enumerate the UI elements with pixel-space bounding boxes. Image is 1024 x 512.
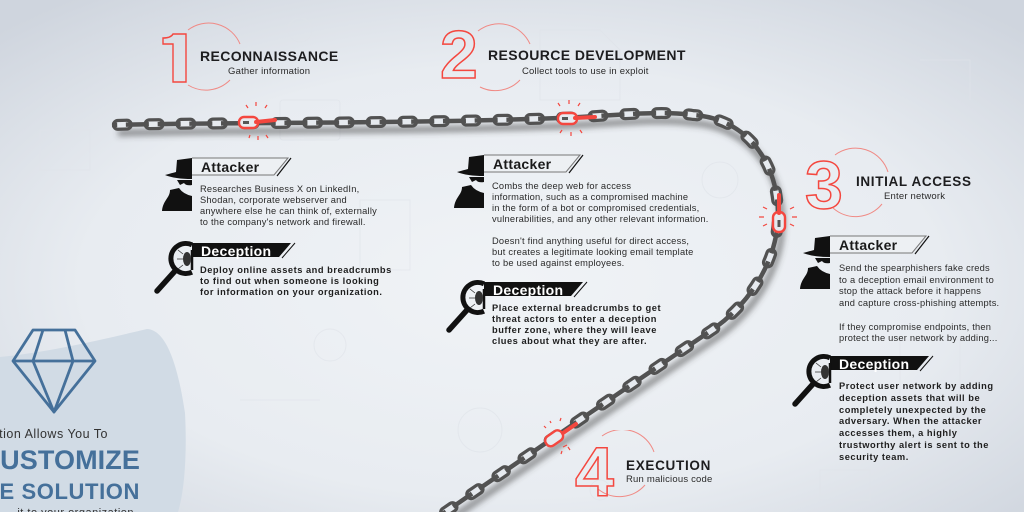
text: deception 3: Protect user network by adding deception assets that will be completely unexpected by the adversary. When the attacker accesses them, a highly trustworthy alert is sent to the security team.	[839, 381, 994, 462]
text: deception 1: Deploy online assets and breadcrumbs to find out when someone is looking for information on your organization.	[200, 265, 392, 297]
panel: deception 1: Deception	[201, 243, 271, 259]
panel: attacker 1: Attacker	[201, 159, 259, 175]
panel: attacker 1	[162, 158, 377, 227]
panel: attacker 3: Attacker	[839, 237, 897, 253]
text: attacker 2: Combs the deep web for access information, such as a compromised machine in the form of a bot or compromised credentials, vulnerabilities, and any other relevant information. Doesn't find anything useful for direct access, but creates a legitimate looking email template to be used against employees.	[492, 181, 709, 268]
step 3 heading: INITIAL ACCESS	[856, 174, 972, 189]
icon: magnifier	[446, 280, 588, 333]
text: attacker 3: Send the spearphishers fake creds to a deception email environment to stop the attack before it happens and capture cross-phishing attempts. If they compromise endpoints, then protect the user network by adding...	[839, 263, 999, 343]
panel: deception 2: Deception	[493, 282, 563, 298]
text: attacker 1: Researches Business X on LinkedIn, Shodan, corporate webserver and anywhere else he can think of, externally to the company's network and firewall.	[200, 184, 377, 227]
step 1 heading: Gather information	[228, 66, 310, 77]
panel: deception 1	[154, 241, 392, 297]
panel: attacker 3	[800, 236, 999, 343]
text: customize callout	[0, 427, 140, 512]
step 2 heading: 2	[440, 17, 478, 93]
step 4 heading	[575, 430, 713, 502]
break: link 2	[558, 100, 595, 136]
text: deception 2: Place external breadcrumbs to get threat actors to enter a deception buffer zone, where they will leave clues about what they are after.	[492, 303, 661, 346]
icon: attacker	[800, 236, 930, 289]
icon: magnifier	[154, 241, 296, 294]
break: link 3	[759, 195, 797, 232]
step 4 heading: EXECUTION	[626, 458, 711, 473]
icon: attacker	[454, 154, 584, 208]
step 3 heading	[805, 147, 972, 220]
panel: deception 3: Deception	[839, 356, 909, 372]
step 2 heading	[440, 17, 686, 93]
step 4 heading: Run malicious code	[626, 474, 713, 485]
break: link 1	[239, 102, 275, 140]
step 1 heading	[162, 22, 339, 91]
icon: magnifier	[792, 354, 934, 407]
step 2 heading: RESOURCE DEVELOPMENT	[488, 47, 686, 63]
panel: deception 3	[792, 354, 994, 462]
icon: attacker	[162, 158, 292, 211]
panel: attacker 2: Attacker	[493, 156, 551, 172]
step 3 heading: Enter network	[884, 191, 945, 202]
icon: diamond	[12, 328, 96, 414]
step 1 heading: RECONNAISSANCE	[200, 48, 339, 64]
step 2 heading: Collect tools to use in exploit	[522, 66, 649, 77]
break: link 4	[543, 418, 576, 454]
panel: attacker 2	[454, 154, 709, 268]
panel: deception 2	[446, 280, 661, 346]
